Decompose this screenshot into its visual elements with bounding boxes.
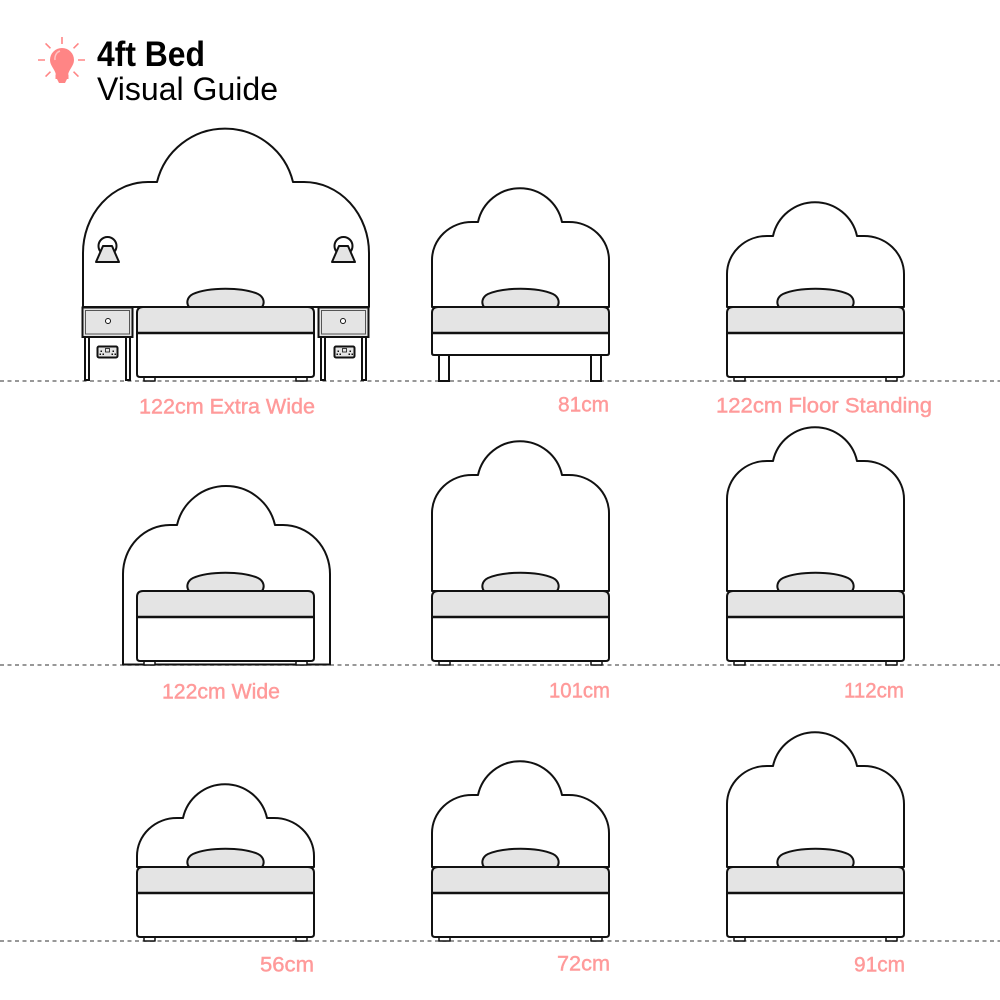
wall lamp right xyxy=(332,237,355,262)
subtitle: Visual Guide: Visual Guide xyxy=(97,71,278,107)
label: 112cm: 112cm xyxy=(844,678,904,702)
label: 101cm: 101cm xyxy=(549,678,610,702)
bed: 122cm Extra Wide xyxy=(82,129,369,381)
bed: 122cm Wide xyxy=(123,486,330,665)
icon: light bulb xyxy=(38,37,85,83)
bed: 91cm xyxy=(727,732,904,941)
label: 81cm: 81cm xyxy=(558,392,609,416)
bedside table right xyxy=(318,308,368,380)
label: 122cm Wide: 122cm Wide xyxy=(162,680,280,704)
label: 91cm: 91cm xyxy=(854,952,905,976)
bed: 72cm xyxy=(432,761,609,941)
label: 56cm: 56cm xyxy=(260,952,314,976)
label: 122cm Extra Wide: 122cm Extra Wide xyxy=(139,394,315,418)
title xyxy=(97,35,278,107)
bed: 56cm xyxy=(137,784,314,941)
label: 122cm Floor Standing: 122cm Floor Standing xyxy=(716,394,932,418)
bed: 101cm xyxy=(432,441,609,665)
mattress and base xyxy=(137,289,314,381)
wall lamp left xyxy=(96,237,119,262)
title: 4ft Bed: 4ft Bed xyxy=(97,35,205,74)
label: 72cm: 72cm xyxy=(557,952,610,976)
bed: 122cm Floor Standing xyxy=(727,202,904,381)
bedside table left xyxy=(82,308,132,380)
headboard xyxy=(83,129,369,307)
bed: 112cm xyxy=(727,427,904,665)
bed: 81cm xyxy=(432,188,609,381)
